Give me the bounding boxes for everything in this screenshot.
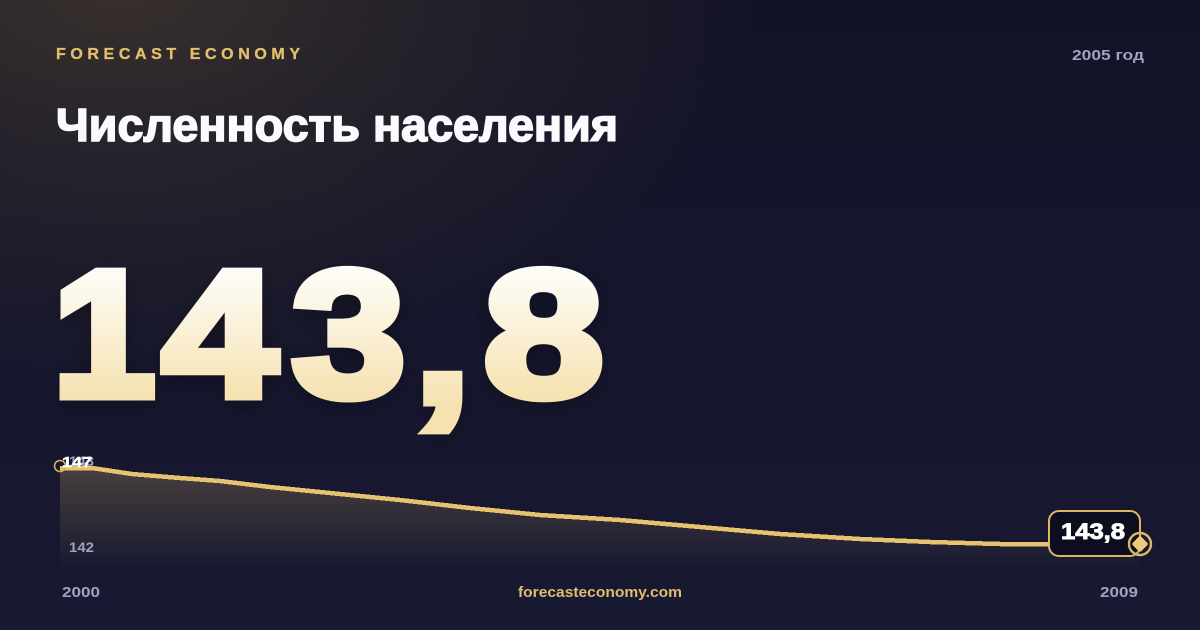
start year: 2000 <box>62 584 100 601</box>
main value: 3 <box>292 233 406 434</box>
main value: , <box>414 239 471 440</box>
main value: 1 <box>52 233 156 434</box>
axis maximum label: 143 <box>69 453 94 469</box>
axis minimum label: 142 <box>69 539 94 555</box>
end marker <box>1129 533 1151 555</box>
brand label: FORECAST ECONOMY <box>56 46 300 63</box>
end value callout <box>1049 511 1140 556</box>
main value: 8 <box>484 234 604 435</box>
start value label: 147 <box>62 454 92 471</box>
start marker <box>54 460 66 472</box>
main value <box>52 233 604 440</box>
year label: 2005 год <box>1072 47 1145 64</box>
end value callout: 143,8 <box>1061 519 1125 544</box>
source website: forecasteconomy.com <box>518 584 682 601</box>
end year: 2009 <box>1100 584 1138 601</box>
main value: 4 <box>162 234 277 435</box>
trend line <box>60 468 1140 544</box>
sparkline chart <box>54 453 1151 565</box>
area fill <box>60 468 1140 565</box>
title: Численность населения <box>56 99 618 151</box>
